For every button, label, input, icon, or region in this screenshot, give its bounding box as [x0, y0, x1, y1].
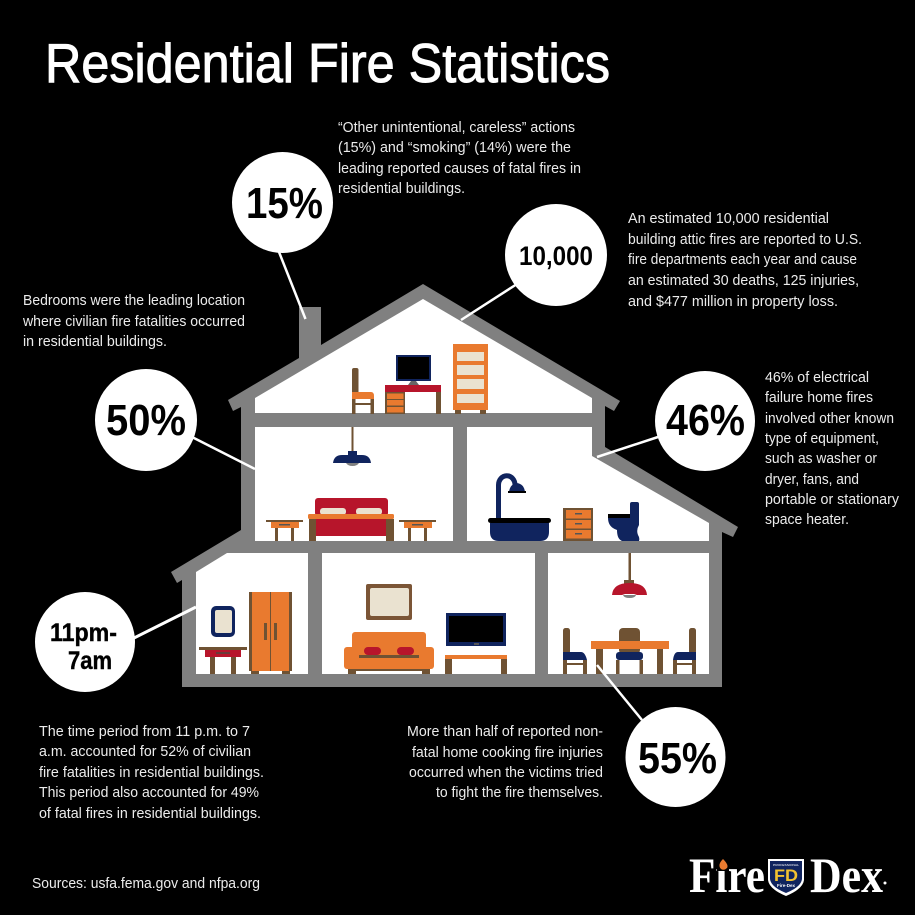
connector line — [461, 284, 517, 320]
living room — [322, 553, 535, 674]
registered mark — [884, 882, 886, 884]
house outline — [171, 284, 738, 687]
dining table with chairs — [563, 628, 696, 674]
entry room — [196, 553, 308, 674]
icon: flame over the i — [717, 856, 729, 871]
sofa — [344, 632, 434, 674]
stat time label — [50, 619, 117, 675]
description text: fatal home cooking fire injuries — [412, 745, 603, 761]
attic room — [255, 299, 592, 413]
stat number: 55% — [638, 734, 717, 783]
description text: “Other unintentional, careless” actions — [338, 120, 575, 136]
description text: to fight the fire themselves. — [436, 785, 603, 801]
description text: leading reported causes of fatal fires in — [338, 161, 581, 177]
dining lamp — [612, 553, 647, 598]
description text: an estimated 30 deaths, 125 injuries, — [628, 273, 859, 289]
description text: involved other known — [765, 411, 894, 427]
entry table — [199, 647, 247, 674]
stat time label: 11pm- — [50, 619, 117, 647]
description text: Bedrooms were the leading location — [23, 293, 245, 309]
description text: and $477 million in property loss. — [628, 294, 838, 310]
description text — [765, 370, 900, 528]
description text: The time period from 11 p.m. to 7 — [39, 724, 250, 740]
television on stand — [445, 613, 507, 674]
left nightstand — [266, 520, 303, 541]
connector line — [597, 437, 658, 457]
bedroom ceiling lamp — [333, 427, 371, 466]
description text: of fatal fires in residential buildings. — [39, 806, 261, 822]
stat number: 15% — [246, 179, 323, 228]
logo word Fire: Fire — [689, 847, 765, 903]
stat circle — [505, 204, 607, 306]
description text: occurred when the victims tried — [409, 765, 603, 781]
description text: space heater. — [765, 512, 849, 528]
bathtub with shower — [488, 476, 551, 541]
description text: fire departments each year and cause — [628, 252, 857, 268]
right nightstand — [399, 520, 436, 541]
description text: portable or stationary — [765, 492, 900, 508]
connector line — [279, 252, 306, 319]
connector line — [134, 607, 196, 638]
icon: shield badge: PROFESSIONAL — [773, 863, 799, 867]
description text — [39, 724, 264, 822]
description text: This period also accounted for 49% — [39, 785, 259, 801]
house cross-section — [171, 284, 738, 687]
callout: 10,000 attic fires — [461, 204, 862, 320]
bathroom — [467, 427, 709, 541]
description text: (15%) and “smoking” (14%) were the — [338, 140, 571, 156]
stat circle — [626, 707, 726, 807]
callout: 55% cooking injuries — [407, 665, 726, 807]
icon: shield badge: FD — [774, 866, 798, 885]
description text: residential buildings. — [338, 181, 465, 197]
description text: More than half of reported non- — [407, 724, 603, 740]
callout: 46% electrical failure — [597, 370, 900, 528]
stat number: 10,000 — [519, 241, 593, 271]
stat circle — [95, 369, 197, 471]
mirror — [211, 606, 235, 637]
dining room — [548, 553, 709, 674]
stat circle — [232, 152, 333, 253]
stat time label: 7am — [68, 647, 112, 675]
description text: fire fatalities in residential buildings. — [39, 765, 264, 781]
bedroom — [255, 427, 453, 541]
connector line — [597, 665, 642, 720]
callout: 50% bedrooms — [22, 293, 255, 471]
description text: such as washer or — [765, 451, 877, 467]
connector line — [190, 436, 255, 469]
attic chair — [352, 368, 374, 414]
icon: shield badge: Fire-Dex — [777, 883, 795, 888]
description text — [338, 120, 581, 197]
description text: where civilian fire fatalities occurred — [22, 314, 245, 330]
callout: 11pm to 7am — [35, 592, 264, 822]
description text: a.m. accounted for 52% of civilian — [39, 744, 251, 760]
logo word Dex: Dex — [810, 847, 883, 903]
stat number: 46% — [666, 396, 745, 445]
description text — [22, 293, 245, 350]
description text — [628, 211, 862, 310]
sources line: Sources: usfa.fema.gov and nfpa.org — [32, 876, 260, 892]
attic bookshelf — [453, 344, 488, 414]
description text: in residential buildings. — [23, 334, 167, 350]
callout: 15% fatal fire causes — [232, 120, 581, 319]
description text: building attic fires are reported to U.S. — [628, 232, 862, 248]
logo: Fire-Dex — [689, 847, 886, 903]
attic desk with computer — [385, 355, 441, 414]
toilet — [608, 502, 639, 541]
icon: shield badge — [768, 859, 804, 896]
picture frame — [366, 584, 412, 620]
bed — [308, 498, 394, 541]
stat circle — [35, 592, 135, 692]
title: Residential Fire Statistics — [45, 32, 610, 94]
bathroom cabinet — [563, 508, 593, 541]
description text — [407, 724, 603, 801]
description text: 46% of electrical — [765, 370, 869, 386]
description text: type of equipment, — [765, 431, 879, 447]
stat number: 50% — [106, 396, 186, 445]
stat circle — [655, 371, 755, 471]
description text: dryer, fans, and — [765, 472, 859, 488]
wardrobe — [249, 592, 292, 674]
description text: An estimated 10,000 residential — [628, 211, 829, 227]
description text: failure home fires — [765, 390, 873, 406]
